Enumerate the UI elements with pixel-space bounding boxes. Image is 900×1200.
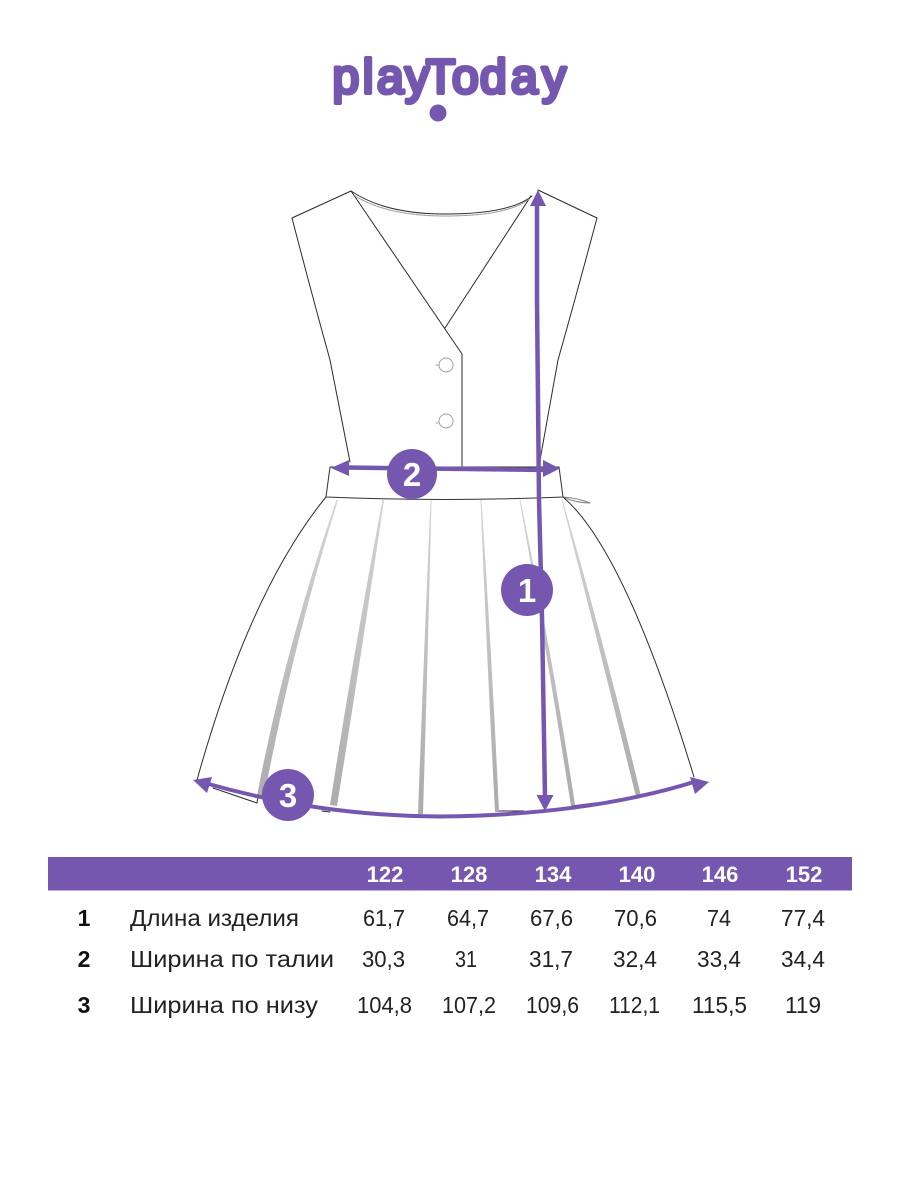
measure 1: length arrow: 1: [518, 572, 536, 609]
row 3: [78, 992, 821, 1018]
row 2: 30,3: [362, 946, 405, 972]
logo: playToday: [332, 51, 566, 104]
measure 2: waist arrow: 2: [403, 456, 421, 493]
row 1: 64,7: [447, 905, 489, 931]
table header: 128: [451, 862, 487, 887]
table header: [48, 857, 852, 890]
dress drawing: [197, 190, 694, 817]
row 3: 104,8: [357, 992, 412, 1018]
row 1: 77,4: [781, 905, 825, 931]
waistband: [326, 467, 563, 500]
row 3: 115,5: [692, 992, 747, 1018]
row 3: Ширина по низу: [130, 992, 319, 1018]
measure 3: hem arrow: 3: [279, 777, 297, 814]
row 2: Ширина по талии: [130, 946, 334, 972]
row 2: 33,4: [697, 946, 741, 972]
table header: 146: [702, 862, 738, 887]
skirt outline: [197, 497, 694, 817]
table header: 152: [786, 862, 822, 887]
row 3: 3: [78, 992, 90, 1018]
size table: [48, 857, 852, 1018]
row 2: 2: [78, 946, 90, 972]
row 1: 74: [707, 905, 731, 931]
row 2: 31,7: [529, 946, 573, 972]
buttons: [436, 358, 453, 428]
table header: 122: [367, 862, 403, 887]
row 1: 1: [78, 905, 91, 931]
row 1: [78, 905, 825, 931]
row 1: 67,6: [530, 905, 573, 931]
row 2: 31: [455, 946, 477, 972]
neckline stitching: [355, 196, 529, 216]
measure 3: hem arrow: [193, 769, 709, 821]
zipper pull: [563, 497, 590, 503]
row 3: 119: [785, 992, 821, 1018]
skirt pleats: [257, 500, 641, 814]
row 1: Длина изделия: [130, 905, 299, 931]
row 2: 32,4: [613, 946, 657, 972]
row 3: 112,1: [609, 992, 660, 1018]
row 3: 107,2: [442, 992, 496, 1018]
row 3: 109,6: [526, 992, 579, 1018]
row 2: 34,4: [781, 946, 825, 972]
row 2: [78, 946, 825, 972]
row 1: 70,6: [614, 905, 657, 931]
measure 2: waist arrow: [331, 449, 560, 499]
row 1: 61,7: [363, 905, 405, 931]
bodice outline: [292, 190, 597, 466]
table header: 140: [619, 862, 655, 887]
table header: 134: [535, 862, 572, 887]
measure 1: length arrow: [501, 190, 554, 811]
